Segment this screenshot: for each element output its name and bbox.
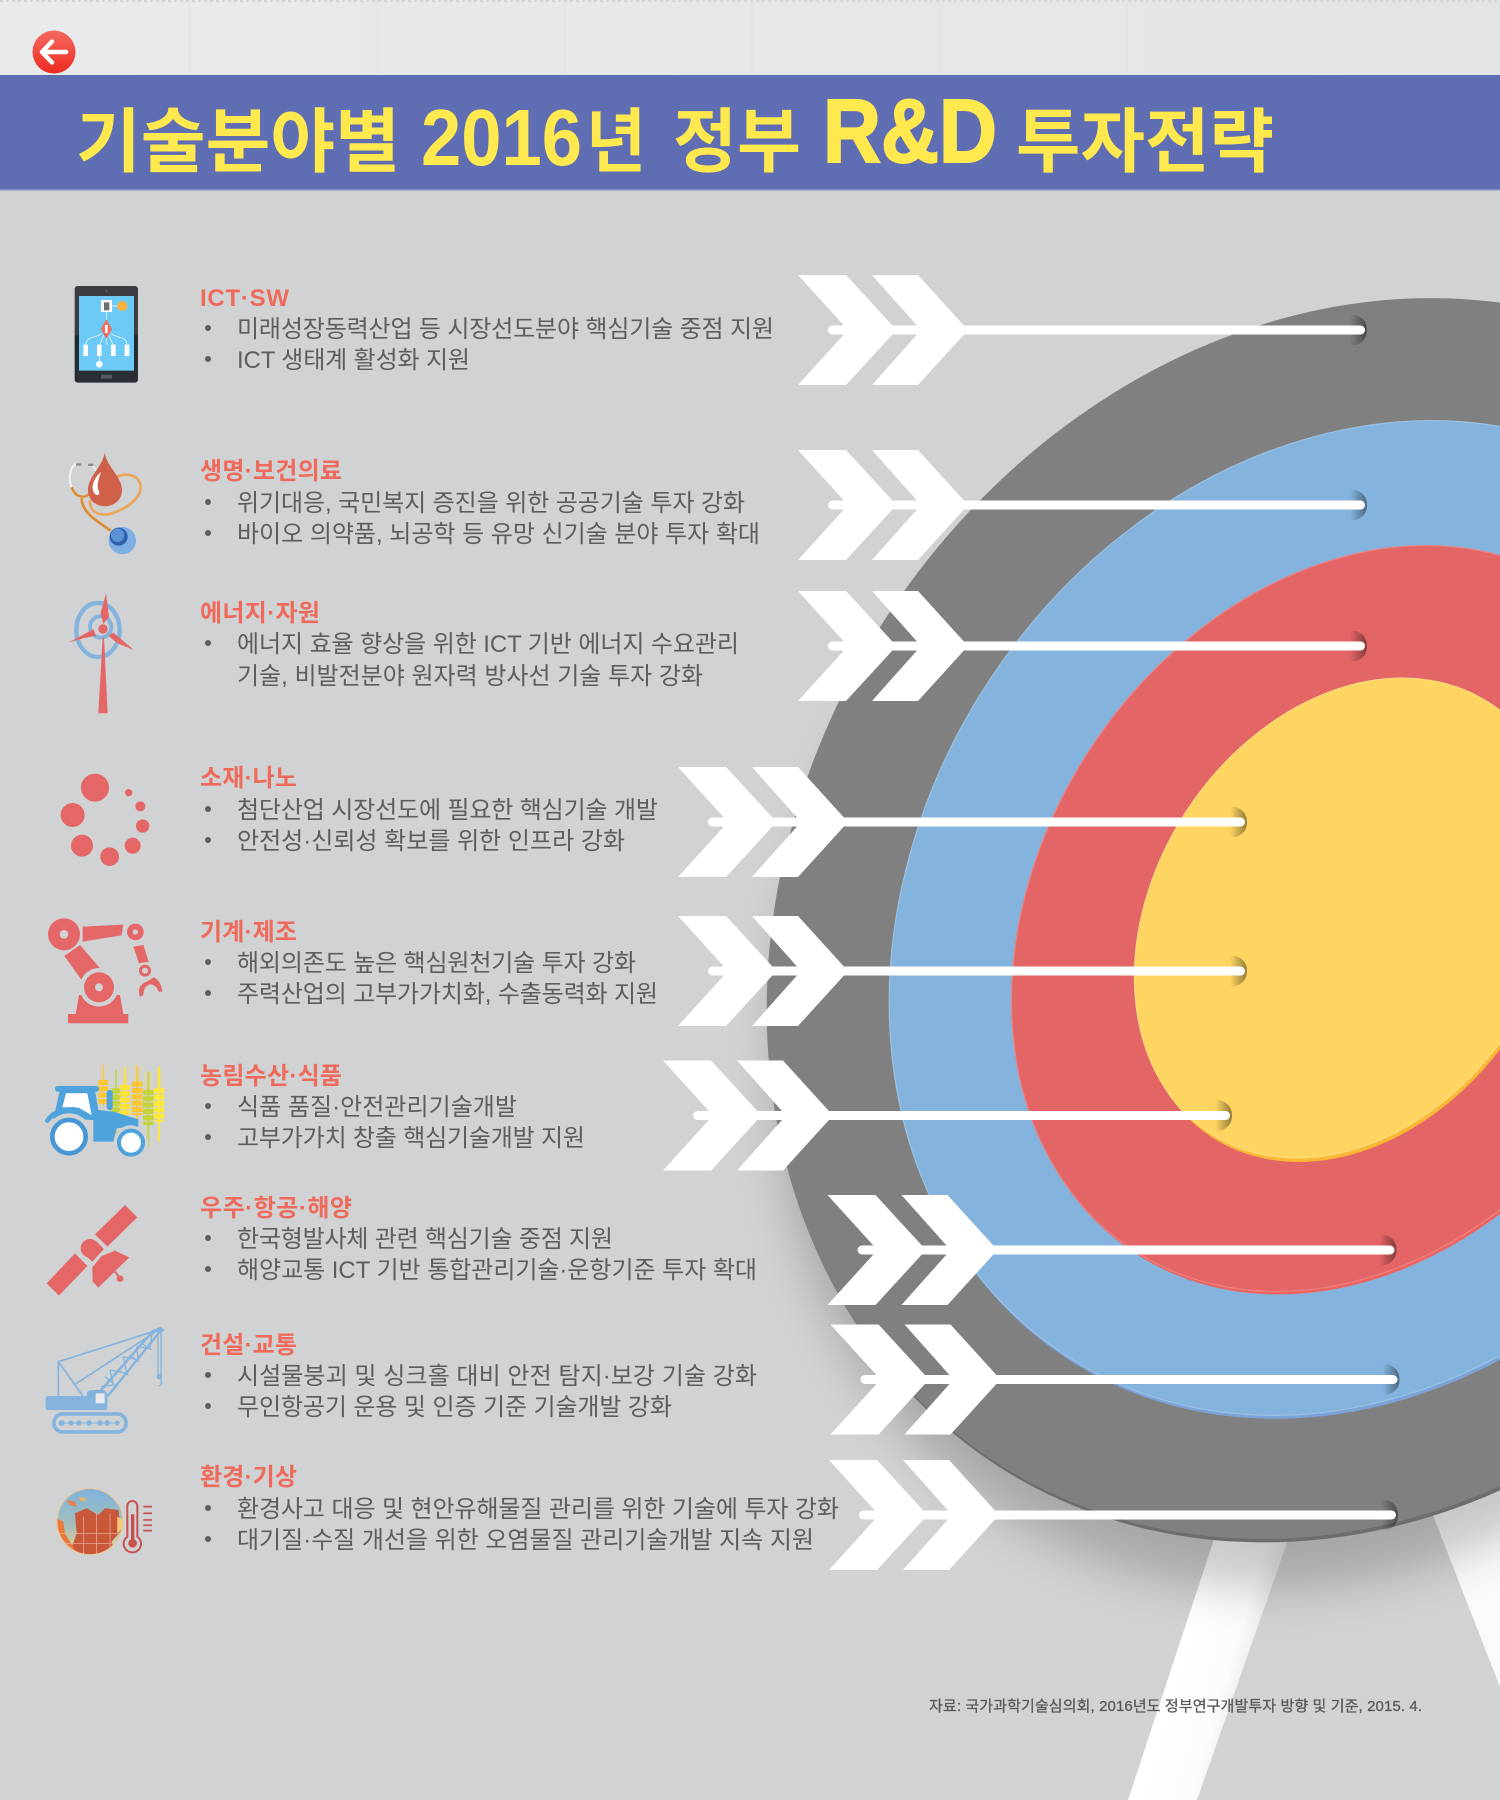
icon: nano particles — [61, 774, 149, 866]
bullet text — [205, 797, 658, 855]
arrow 6 — [663, 1060, 1232, 1170]
title: 2016 — [421, 93, 582, 182]
row: ICT SW — [200, 285, 774, 374]
icon: crawler crane — [46, 1327, 165, 1432]
heading: ICT·SW — [200, 285, 289, 312]
bullet text: 안전성·신뢰성 확보를 위한 인프라 강화 — [237, 828, 625, 855]
bullet text — [205, 950, 658, 1008]
title: R&D — [823, 82, 997, 182]
title band — [0, 75, 1500, 190]
bullet text: 대기질·수질 개선을 위한 오염물질 관리기술개발 지속 지원 — [237, 1527, 814, 1554]
bullet text — [205, 631, 739, 690]
bullet text: 바이오 의약품, 뇌공학 등 유망 신기술 분야 투자 확대 — [237, 521, 760, 548]
ring: outer gray — [535, 77, 1500, 1763]
heading: 에너지·자원 — [200, 600, 320, 627]
ring: blue — [701, 242, 1500, 1597]
bullet text: 첨단산업 시장선도에 필요한 핵심기술 개발 — [237, 797, 658, 824]
bullet text — [205, 1226, 757, 1284]
ring: yellow centre — [1046, 597, 1500, 1243]
arrow 4 — [678, 767, 1247, 877]
bullet text: 에너지 효율 향상을 위한 ICT 기반 에너지 수요관리 — [237, 631, 739, 658]
bullet text: 무인항공기 운용 및 인증 기준 기술개발 강화 — [237, 1394, 672, 1421]
icon: wind turbine — [68, 593, 134, 713]
bullet text: 해양교통 ICT 기반 통합관리기술·운항기준 투자 확대 — [237, 1257, 757, 1284]
row: environment — [200, 1464, 839, 1554]
row: materials — [200, 765, 658, 855]
arrow 8 — [830, 1324, 1400, 1434]
bullet text — [205, 1363, 757, 1421]
icon: blood drop and stethoscope — [70, 453, 141, 554]
arrow 3 — [798, 591, 1367, 701]
heading: 건설·교통 — [200, 1332, 297, 1359]
icon: satellite — [47, 1205, 137, 1296]
bullet text — [205, 316, 774, 374]
icon: globe and thermometer — [53, 1488, 152, 1558]
target shadow — [546, 142, 1500, 1800]
heading: 기계·제조 — [200, 919, 297, 946]
heading: 환경·기상 — [200, 1464, 297, 1491]
row: construction — [200, 1332, 757, 1421]
bullet text: 기술, 비발전분야 원자력 방사선 기술 투자 강화 — [237, 663, 703, 690]
heading: 소재·나노 — [200, 765, 297, 792]
title: 년 — [586, 86, 646, 187]
heading: 생명·보건의료 — [200, 458, 342, 485]
ring: red — [872, 415, 1500, 1425]
top band — [0, 0, 1500, 75]
bullet text: ICT 생태계 활성화 지원 — [237, 347, 470, 374]
arrow 5 — [678, 916, 1247, 1026]
bullet text: 식품 품질·안전관리기술개발 — [237, 1094, 517, 1121]
title: 정부 — [673, 86, 801, 187]
bullet text: 한국형발사체 관련 핵심기술 중점 지원 — [237, 1226, 613, 1253]
target stand legs — [1128, 1400, 1500, 1800]
title: 투자전략 — [1016, 86, 1274, 187]
arrow 7 — [828, 1195, 1396, 1305]
icon: tractor and wheat — [46, 1063, 162, 1160]
row: machinery — [200, 919, 658, 1008]
bullet text — [205, 1094, 585, 1152]
row: life and health — [200, 458, 760, 548]
bullet text: 시설물붕괴 및 싱크홀 대비 안전 탐지·보강 기술 강화 — [237, 1363, 757, 1390]
title: 기술분야별 — [76, 86, 400, 187]
arrow 2 — [798, 450, 1367, 560]
bullet text — [205, 1496, 839, 1554]
bullet text: 환경사고 대응 및 현안유해물질 관리를 위한 기술에 투자 강화 — [237, 1496, 839, 1523]
icon: back button — [32, 30, 76, 74]
icon: tablet — [75, 286, 138, 383]
source note: 자료: 국가과학기술심의회, 2016년도 정부연구개발투자 방향 및 기준, 2015. 4. — [929, 1698, 1422, 1715]
row: agriculture — [200, 1063, 585, 1152]
bullet text: 미래성장동력산업 등 시장선도분야 핵심기술 중점 지원 — [237, 316, 774, 343]
bullet text: 주력산업의 고부가가치화, 수출동력화 지원 — [237, 981, 658, 1008]
bullet text: 고부가가치 창출 핵심기술개발 지원 — [237, 1125, 585, 1152]
row: energy — [200, 600, 739, 690]
row: space — [200, 1195, 757, 1284]
arrow 9 — [829, 1460, 1398, 1570]
title — [76, 82, 1274, 187]
icon: robot arm — [48, 918, 162, 1023]
bullet text: 해외의존도 높은 핵심원천기술 투자 강화 — [237, 950, 636, 977]
bullet text: 위기대응, 국민복지 증진을 위한 공공기술 투자 강화 — [237, 490, 745, 517]
heading: 우주·항공·해양 — [200, 1195, 352, 1222]
bullet text — [205, 490, 760, 548]
heading: 농림수산·식품 — [200, 1063, 342, 1090]
arrow 1 — [798, 275, 1367, 385]
target — [535, 77, 1500, 1763]
